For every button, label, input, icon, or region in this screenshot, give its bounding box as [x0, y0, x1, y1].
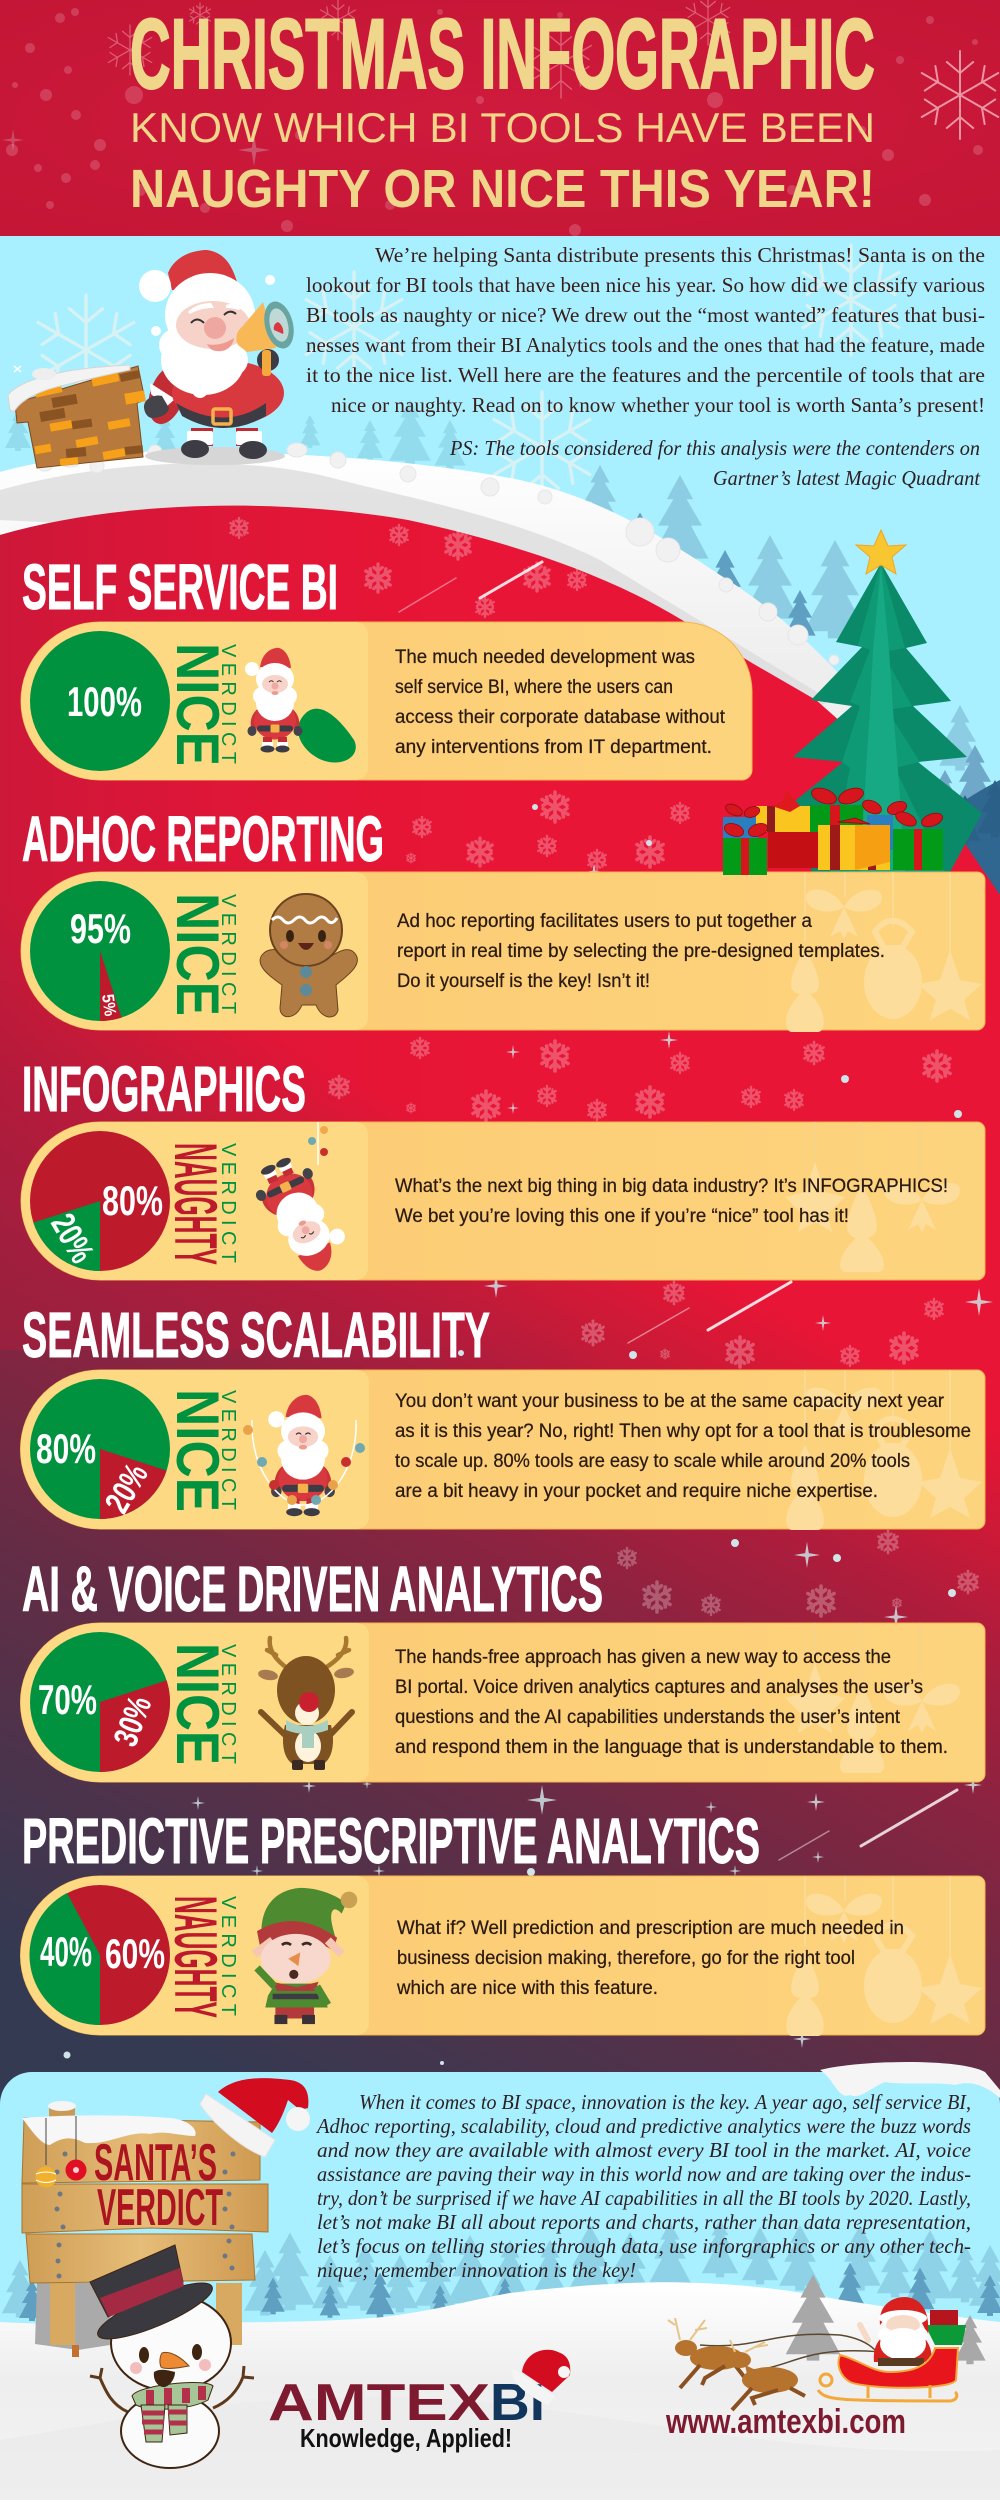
verdict	[162, 1143, 239, 1265]
body text	[395, 1391, 971, 1502]
footer text	[315, 2090, 971, 2282]
body text: What’s the next big thing in big data industry? It’s INFOGRAPHICS!	[395, 1176, 948, 1197]
text: NAUGHTY	[162, 1896, 229, 2018]
body text	[395, 647, 726, 758]
heading: INFOGRAPHICS	[22, 1053, 306, 1125]
verdict: NICE	[164, 1643, 231, 1765]
title	[130, 0, 875, 219]
snow drip top right	[820, 2062, 1000, 2098]
body text: BI portal. Voice driven analytics captures and analyses the user’s	[395, 1677, 923, 1698]
verdict: NICE	[164, 893, 231, 1016]
panel: adhoc reporting	[21, 803, 985, 1032]
card	[21, 1623, 985, 1782]
pie chart	[30, 1632, 170, 1772]
pie chart: 80%	[36, 1425, 96, 1472]
card	[21, 1370, 985, 1530]
tagline: Knowledge, Applied!	[300, 2423, 512, 2453]
PS note: PS: The tools considered for this analysis were the contenders on	[449, 436, 980, 460]
PS note	[449, 436, 981, 490]
icon: elf	[254, 1888, 357, 2024]
pie chart: 80%	[102, 1177, 163, 1224]
icon: santa hat on sign	[200, 2078, 310, 2157]
gifts in sleigh	[930, 2310, 958, 2332]
verdict: VERDICT	[217, 1390, 239, 1510]
header banner	[0, 0, 1000, 236]
pie chart: 30%	[107, 1691, 159, 1751]
verdict: NICE	[164, 1389, 231, 1512]
body text: self service BI, where the users can	[395, 677, 673, 698]
pie chart	[30, 1379, 170, 1520]
pie chart: 40%	[40, 1928, 92, 1975]
panel: santa's verdict footer	[0, 2062, 1000, 2500]
pie chart: 70%	[38, 1676, 97, 1723]
red patterned background	[0, 506, 1000, 2500]
subtitle line 1: KNOW WHICH BI TOOLS HAVE BEEN	[130, 104, 875, 151]
intro text: nesses want from their BI Analytics tools and the ones that had the feature, made	[306, 333, 985, 357]
pie chart: 5%	[98, 993, 120, 1017]
body text: and respond them in the language that is understandable to them.	[395, 1737, 948, 1758]
santa in sleigh	[860, 2297, 932, 2366]
icon: logo santa hat	[512, 2350, 570, 2405]
intro text	[306, 243, 985, 490]
heading: AI & VOICE DRIVEN ANALYTICS	[22, 1553, 603, 1625]
logo: AMTEX	[268, 2374, 490, 2432]
icon: ornaments	[36, 2116, 86, 2188]
footer text: let’s focus on telling stories through data, use inforgraphics or any other tech-	[317, 2234, 971, 2258]
icon: gingerbread man	[260, 894, 357, 1017]
body text	[397, 911, 885, 992]
icon: reindeer	[257, 1638, 355, 1770]
body text	[395, 1647, 948, 1758]
card	[21, 622, 752, 780]
icon: chimney	[8, 365, 146, 468]
wooden sign	[22, 2078, 310, 2357]
icon: snowman	[90, 2245, 254, 2468]
card	[21, 1122, 985, 1280]
pie chart: 95%	[70, 905, 131, 952]
heading: ADHOC REPORTING	[22, 803, 384, 875]
snow ground	[0, 2282, 1000, 2500]
footer text: try, don’t be surprised if we have AI capabilities in all the BI tools by 2020. Lastly,	[317, 2186, 971, 2210]
icon: star	[856, 530, 906, 574]
body text: business decision making, therefore, go for the right tool	[397, 1948, 855, 1969]
icon: santa with sack	[245, 648, 356, 763]
verdict: VERDICT	[217, 1896, 239, 2016]
body text: You don’t want your business to be at the same capacity next year	[395, 1391, 945, 1412]
reins	[700, 2334, 880, 2370]
pie chart	[29, 1885, 170, 2025]
intro text: it to the nice list. Well here are the features and the percentile of tools that are	[306, 363, 985, 387]
heading: SEAMLESS SCALABILITY	[22, 1299, 490, 1371]
sign title	[94, 2134, 223, 2237]
icon: santa with megaphone	[139, 250, 298, 459]
body text: What if? Well prediction and prescription are much needed in	[397, 1918, 904, 1939]
intro text: nice or naughty. Read on to know whether your tool is worth Santa’s present!	[331, 393, 985, 417]
pie chart: 100%	[67, 678, 142, 725]
christmas tree	[790, 530, 982, 872]
body text: which are nice with this feature.	[396, 1978, 658, 1999]
pie chart	[30, 881, 170, 1021]
body text: any interventions from IT department.	[395, 737, 712, 758]
pie chart	[30, 1131, 170, 1271]
snowflakes and stars on background	[64, 518, 993, 2065]
footer text: nique; remember innovation is the key!	[317, 2258, 636, 2282]
body text: access their corporate database without	[395, 707, 726, 728]
panel: predictive prescriptive analytics	[21, 1805, 985, 2036]
body text: Do it yourself is the key! Isn’t it!	[397, 971, 650, 992]
card	[21, 872, 985, 1032]
snowy hill	[0, 451, 1000, 940]
heading: SELF SERVICE BI	[22, 551, 338, 623]
body text: The much needed development was	[395, 647, 695, 668]
chimney snow	[8, 365, 130, 412]
body text	[395, 1176, 948, 1227]
icon: megaphone	[236, 298, 298, 376]
pie chart	[30, 631, 170, 771]
body text: are a bit heavy in your pocket and require niche expertise.	[395, 1481, 878, 1502]
shooting stars	[399, 562, 957, 1860]
website url: www.amtexbi.com	[665, 2403, 906, 2441]
verdict	[162, 1896, 239, 2018]
sleigh	[838, 2348, 958, 2388]
winter sky scenery	[0, 236, 1000, 940]
logo: BI	[490, 2374, 545, 2432]
verdict: VERDICT	[217, 644, 239, 764]
icon: upside down santa	[246, 1122, 354, 1282]
body text: questions and the AI capabilities understands the user’s intent	[395, 1707, 901, 1728]
icon: gift boxes	[723, 785, 944, 875]
body text	[396, 1918, 904, 1999]
body text: Ad hoc reporting facilitates users to put together a	[397, 911, 812, 932]
sign title: SANTA’S	[94, 2134, 217, 2192]
intro text: We’re helping Santa distribute presents this Christmas! Santa is on the	[375, 243, 985, 267]
body text: as it is this year? No, right! Then why opt for a tool that is troublesome	[395, 1421, 971, 1442]
text: NAUGHTY	[162, 1143, 229, 1265]
subtitle line 2: NAUGHTY OR NICE THIS YEAR!	[130, 159, 875, 219]
panel: ai and voice driven analytics	[21, 1553, 985, 1782]
card	[21, 1876, 985, 2036]
sign title: VERDICT	[97, 2179, 223, 2237]
reindeer	[668, 2318, 805, 2410]
verdict: VERDICT	[217, 1143, 239, 1263]
intro text: lookout for BI tools that have been nice his year. So how did we classify various	[306, 273, 985, 297]
verdict: VERDICT	[217, 894, 239, 1014]
intro text: BI tools as naughty or nice? We drew out the “most wanted” features that busi-	[306, 303, 985, 327]
logo	[268, 2350, 570, 2453]
pie chart: 20%	[98, 1457, 156, 1520]
verdict: NICE	[164, 643, 231, 766]
footer text: Adhoc reporting, scalability, cloud and predictive analytics were the buzz words	[315, 2114, 971, 2138]
icon: santa with garland	[243, 1395, 365, 1516]
footer text: When it comes to BI space, innovation is the key. A year ago, self service BI,	[359, 2090, 971, 2114]
verdict: VERDICT	[217, 1644, 239, 1764]
body text: report in real time by selecting the pre-designed templates.	[397, 941, 885, 962]
panel: self service bi	[21, 551, 752, 780]
footer text: let’s not make BI all about reports and charts, rather than data representation,	[317, 2210, 971, 2234]
panel: seamless scalability	[21, 1299, 985, 1530]
forest	[2, 2220, 1000, 2321]
body text: The hands-free approach has given a new way to access the	[395, 1647, 891, 1668]
icon: santa sleigh with reindeer	[668, 2274, 986, 2410]
PS note: Gartner’s latest Magic Quadrant	[713, 466, 981, 490]
body text: to scale up. 80% tools are easy to scale while around 20% tools	[395, 1451, 910, 1472]
panel: infographics	[21, 1053, 985, 1282]
footer text: and now they are available with almost every BI tool in the market. AI, voice	[317, 2138, 971, 2162]
footer text: assistance are paving their way in this world now and are taking over the indus-	[317, 2162, 971, 2186]
pie chart: 60%	[105, 1930, 165, 1977]
pie chart: 20%	[43, 1207, 101, 1270]
body text: We bet you’re loving this one if you’re “nice” tool has it!	[395, 1206, 849, 1227]
